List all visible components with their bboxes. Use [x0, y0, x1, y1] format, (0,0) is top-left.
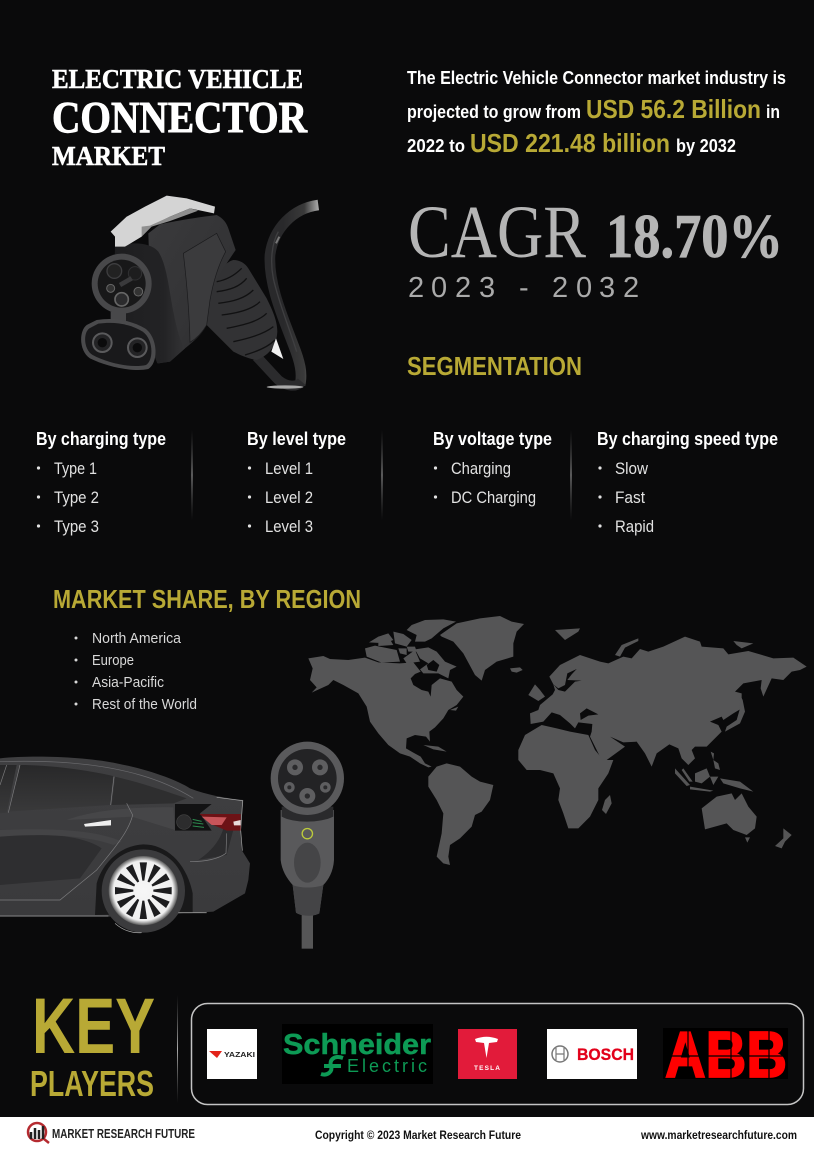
logo: Schneider Electric: Electric	[347, 1056, 427, 1076]
heading: segmentation: SEGMENTATION	[407, 351, 582, 381]
highlights	[271, 338, 283, 359]
heading: market share by region: MARKET SHARE, BY REGION	[53, 584, 361, 614]
segmentation: by level type	[247, 429, 346, 536]
grip	[207, 260, 277, 360]
logo: Bosch: BOSCH	[577, 1045, 634, 1064]
market growth statement: in	[766, 102, 780, 122]
cable	[302, 913, 313, 949]
market growth statement: USD 221.48 billion	[470, 128, 670, 158]
status ring	[302, 828, 312, 839]
car body	[0, 757, 250, 917]
South America, Africa, Southeast Asia, Oceania	[428, 725, 792, 865]
wheel	[95, 844, 193, 915]
illustration: electric car	[0, 757, 250, 933]
world map	[308, 616, 807, 865]
heading: key players: PLAYERS	[30, 1063, 154, 1104]
copyright: Copyright © 2023 Market Research Future	[315, 1128, 521, 1142]
taillight	[199, 814, 241, 831]
segmentation: by level type: Level 1	[265, 460, 313, 478]
housing	[148, 215, 236, 363]
segmentation: by voltage type: Charging	[451, 460, 511, 478]
charge port	[175, 804, 212, 831]
region list: Asia-Pacific	[92, 675, 164, 691]
logo: Market Research Future: MARKET RESEARCH FUTURE	[52, 1127, 195, 1141]
segmentation: by charging type: Type 2	[54, 489, 99, 507]
title: MARKET	[52, 141, 165, 171]
CAGR period: 2023 - 2032	[408, 272, 639, 304]
segmentation: by charging speed type: By charging speed type	[597, 429, 778, 449]
region list: Europe	[92, 653, 134, 669]
latch clip	[111, 196, 215, 247]
segmentation: by charging type: Type 3	[54, 518, 99, 536]
segmentation: by charging type: Type 1	[54, 460, 97, 478]
market growth statement: projected to grow from	[407, 102, 581, 122]
DC lower inlet	[81, 319, 156, 370]
segmentation: by charging type: By charging type	[36, 429, 166, 449]
footer bar	[0, 1117, 814, 1150]
logo: Yazaki	[207, 1029, 257, 1079]
icon: EV connector plug	[81, 196, 318, 389]
segmentation: by charging type	[36, 429, 166, 536]
windows	[8, 765, 113, 812]
panel: key player logos	[192, 1004, 804, 1104]
segmentation: by charging speed type: Fast	[615, 489, 645, 507]
logo: Tesla	[458, 1029, 517, 1079]
segmentation: by level type: Level 3	[265, 518, 313, 536]
CAGR figure	[408, 191, 783, 274]
market growth statement: by 2032	[676, 136, 736, 156]
title: CONNECTOR	[52, 93, 308, 142]
logo: Schneider Electric	[282, 1024, 433, 1084]
Americas north and Greenland	[308, 616, 524, 767]
title	[52, 64, 308, 171]
segmentation: by charging speed type: Slow	[615, 460, 648, 478]
region list	[74, 631, 197, 713]
segmentation: by voltage type	[433, 429, 552, 507]
segmentation: by charging speed type	[597, 429, 778, 536]
market growth statement: USD 56.2 Billion	[586, 94, 761, 124]
cable	[270, 205, 318, 385]
tail	[257, 357, 302, 386]
logo: ABB: ABB	[665, 1018, 787, 1091]
logo: Bosch	[547, 1029, 637, 1079]
housing panel	[183, 233, 226, 342]
AC ring	[92, 254, 152, 314]
body lines	[0, 761, 193, 798]
market growth statement: 2022 to	[407, 136, 465, 156]
illustration: charging plug	[271, 742, 344, 949]
title: ELECTRIC VEHICLE	[52, 64, 303, 94]
segmentation: by charging speed type: Rapid	[615, 518, 654, 536]
logo: Schneider Electric: Schneider	[283, 1029, 431, 1061]
market growth statement	[407, 68, 786, 158]
logo: Market Research Future	[28, 1123, 195, 1143]
snout	[113, 243, 185, 363]
door handle	[84, 820, 111, 827]
segmentation: by level type: By level type	[247, 429, 346, 449]
head	[282, 807, 333, 822]
Eurasia	[528, 628, 807, 767]
CAGR figure: CAGR	[408, 191, 586, 274]
region list: Rest of the World	[92, 697, 197, 713]
door panels	[0, 834, 102, 885]
segmentation: by voltage type: DC Charging	[451, 489, 536, 507]
heading: key players: KEY	[32, 981, 155, 1070]
logo: Yazaki: YAZAKI	[224, 1050, 255, 1059]
logo: Tesla: TESLA	[474, 1065, 500, 1072]
heading: key players	[30, 981, 155, 1104]
segmentation: by voltage type: By voltage type	[433, 429, 552, 449]
CAGR figure: 18.70%	[606, 203, 783, 271]
segmentation: by level type: Level 2	[265, 489, 313, 507]
handle	[281, 810, 334, 916]
region list: North America	[92, 631, 182, 647]
